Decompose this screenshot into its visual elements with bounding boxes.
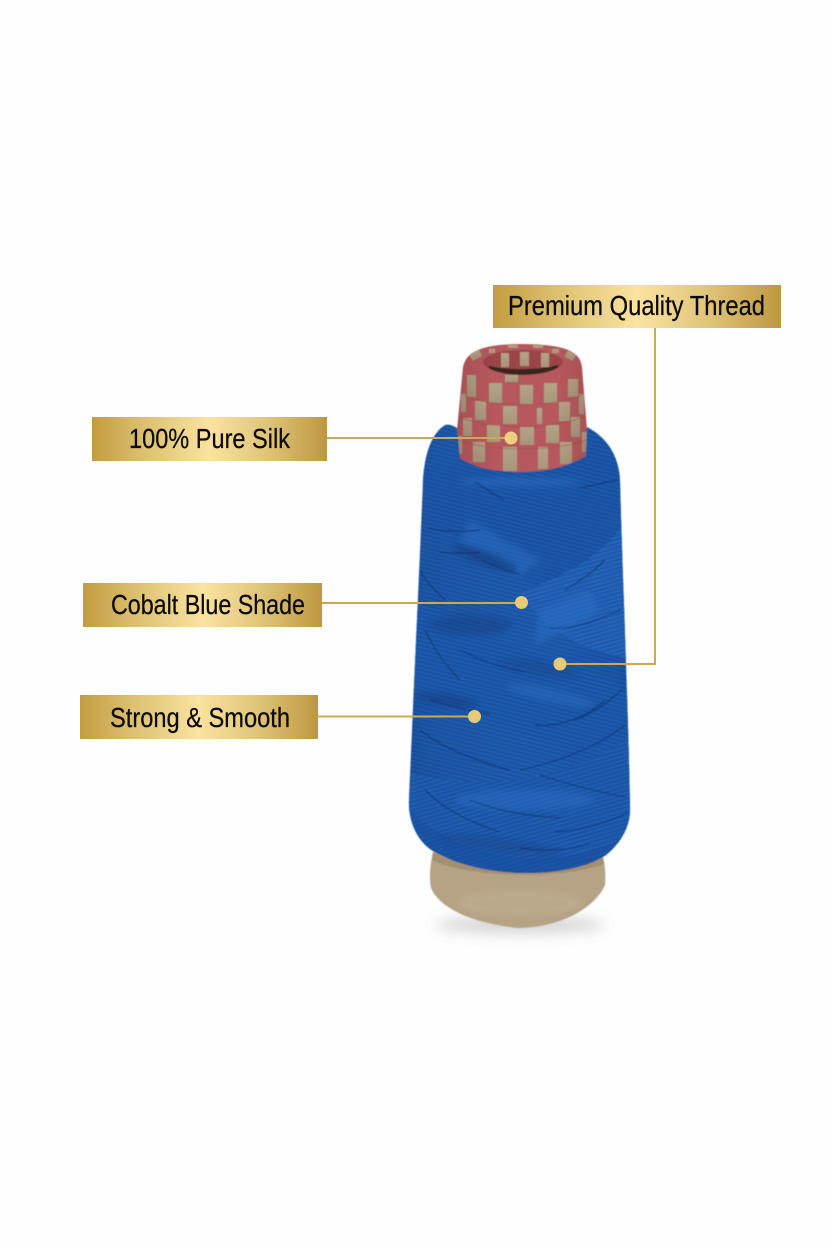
connector line [318,716,474,718]
callout: strong and smooth [80,695,481,739]
label text: Premium Quality Thread [508,290,765,321]
connector line [560,328,655,664]
connector line [327,437,511,439]
label text: 100% Pure Silk [129,423,291,454]
product: thread spool [400,340,640,933]
highlights and shadows [412,477,600,860]
checkered paper cone [456,343,588,473]
spool shadow [435,917,605,933]
marker dot [554,658,566,670]
marker dot [504,432,518,444]
callout: premium quality thread [493,285,781,670]
cone opening [483,350,563,370]
lower left band [412,604,630,774]
label text: Strong & Smooth [110,702,290,733]
callout: 100% pure silk [92,417,518,461]
connector line [322,602,521,604]
label plate [80,695,318,739]
label text: Cobalt Blue Shade [111,589,305,620]
upper wrap band [422,445,622,555]
infographic canvas [80,285,781,939]
marker dot [468,710,481,723]
marker dot [515,596,528,609]
dark thread strokes [420,480,628,850]
label plate [83,583,322,627]
blue thread body [400,420,640,880]
bottom wraps [408,740,630,874]
label plate [92,417,327,461]
diagonal crossing band right [521,530,626,658]
cardboard base [430,852,605,928]
callout: cobalt blue shade [83,583,528,627]
label plate [493,285,781,328]
